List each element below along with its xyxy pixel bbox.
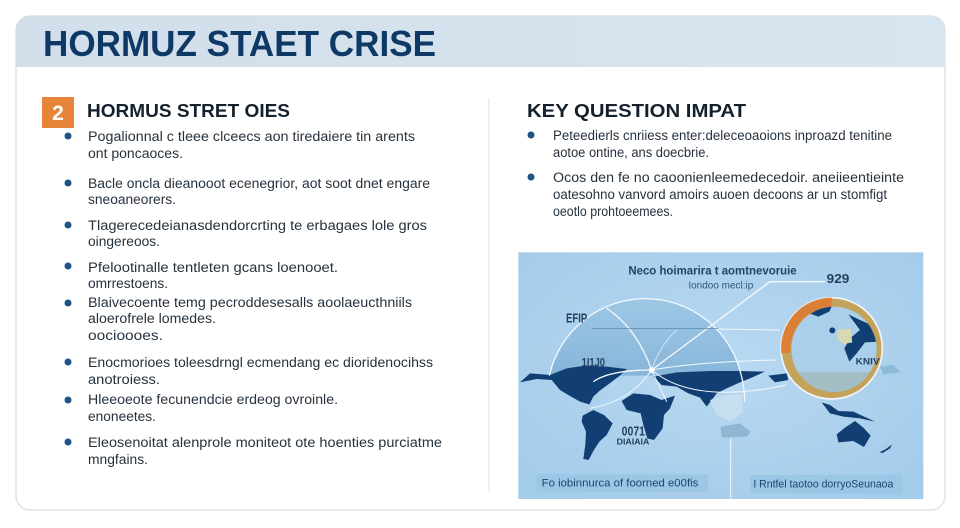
bullet 7: enoneetes. [88,409,156,424]
bullet 6: Enocmorioes toleesdrngl ecmendang ec dioridenocihss [88,355,433,370]
bullet 1: ont poncaoces. [88,146,183,161]
bullet 3: Tlagerecedeianasdendorcrting te erbagaes lole gros [88,218,427,233]
right bullet 1: Peteedierls cnriiess enter:deleceoaoions inproazd tenitine [553,128,892,143]
globe dome [549,299,741,376]
title: HORMUZ STAET CRISE [43,23,436,64]
bullet 4: omrrestoens. [88,276,168,291]
bullet 5 [64,295,412,343]
New Zealand [879,444,892,453]
pale land highlights [710,394,743,422]
panel: right column [527,101,904,219]
left heading: HORMUS STRET OIES [87,101,290,121]
number badge: 2 [52,102,64,125]
right bullet 2: Ocos den fe no caoonienleemedecedoir. aneiieentieinte [553,170,904,185]
value label 0071 [617,425,650,446]
value label EFIP: EFIP [566,310,587,325]
bullet 3: oingereoos. [88,234,160,249]
value label 1110: 1I1J0 [582,356,605,370]
East Asia strip [768,373,788,382]
North America [520,366,627,404]
bullet 4 [64,260,338,291]
inset globe [781,298,882,402]
bullet 8: mngfains. [88,452,148,467]
bullet 3 [64,218,427,249]
bullet 8: Eleosenoitat alenprole moniteot ote hoenties purciatme [88,435,442,450]
bullet 6 [64,355,433,387]
legend left [537,474,708,492]
legend right: I Rntfel taotoo dorryoSeunaoa [753,479,894,491]
bullet 2: Bacle oncla dieanooot ecenegrior, aot soot dnet engare [88,176,430,191]
bullet 1: Pogalionnal c tleee clceecs aon tiredaiere tin arents [88,129,415,144]
map subtitle: Iondoo mecl:ip [688,281,753,292]
South America [582,410,613,460]
bullet 7: Hleeoeote fecunendcie erdeog ovroinle. [88,392,338,407]
value label 0071: DIAIAIA [617,437,650,446]
bullet 2: sneoaneorers. [88,192,176,207]
continents [520,366,892,460]
Eurasia [653,371,765,407]
bullet 6: anotroiess. [88,372,160,387]
right bullet 2 [528,170,904,219]
route lines [549,282,825,499]
number badge [42,97,74,128]
bullet 8 [64,435,442,467]
bullet 1 [64,129,415,161]
right bullet 2: oeotlo prohtoeemees. [553,204,673,219]
bullet 4: Pfelootinalle tentleten gcans loenooet. [88,260,338,275]
bullet 5: aloerofrele lomedes. [88,311,216,326]
panel: left column [42,97,442,467]
legend right [750,475,903,493]
bullet 5: Blaivecoente temg pecroddesesalls aoolaeucthniils [88,295,412,310]
value label 0071: 0071 [622,425,645,439]
value label 929: 929 [827,271,849,286]
right bullet 2: oatesohno vanvord amoirs auoen decoons ar un stomfigt [553,187,887,202]
right bullet 1: aotoe ontine, ans doecbrie. [553,145,709,160]
bullet 2 [64,176,430,207]
inset label: KNIV [856,357,880,367]
bullet 5: oocioooes. [88,328,163,343]
header band [16,16,945,67]
Australia [837,421,871,447]
right heading: KEY QUESTION IMPAT [527,101,746,121]
Indonesia [822,402,875,422]
Africa [622,393,675,440]
panel: world map [518,252,923,499]
legend left: Fo iobinnurca of foorned e00fis [542,478,699,490]
map title: Neco hoimarira t aomtnevoruie [628,265,797,278]
right bullet 1 [528,128,892,160]
bullet 7 [64,392,338,424]
